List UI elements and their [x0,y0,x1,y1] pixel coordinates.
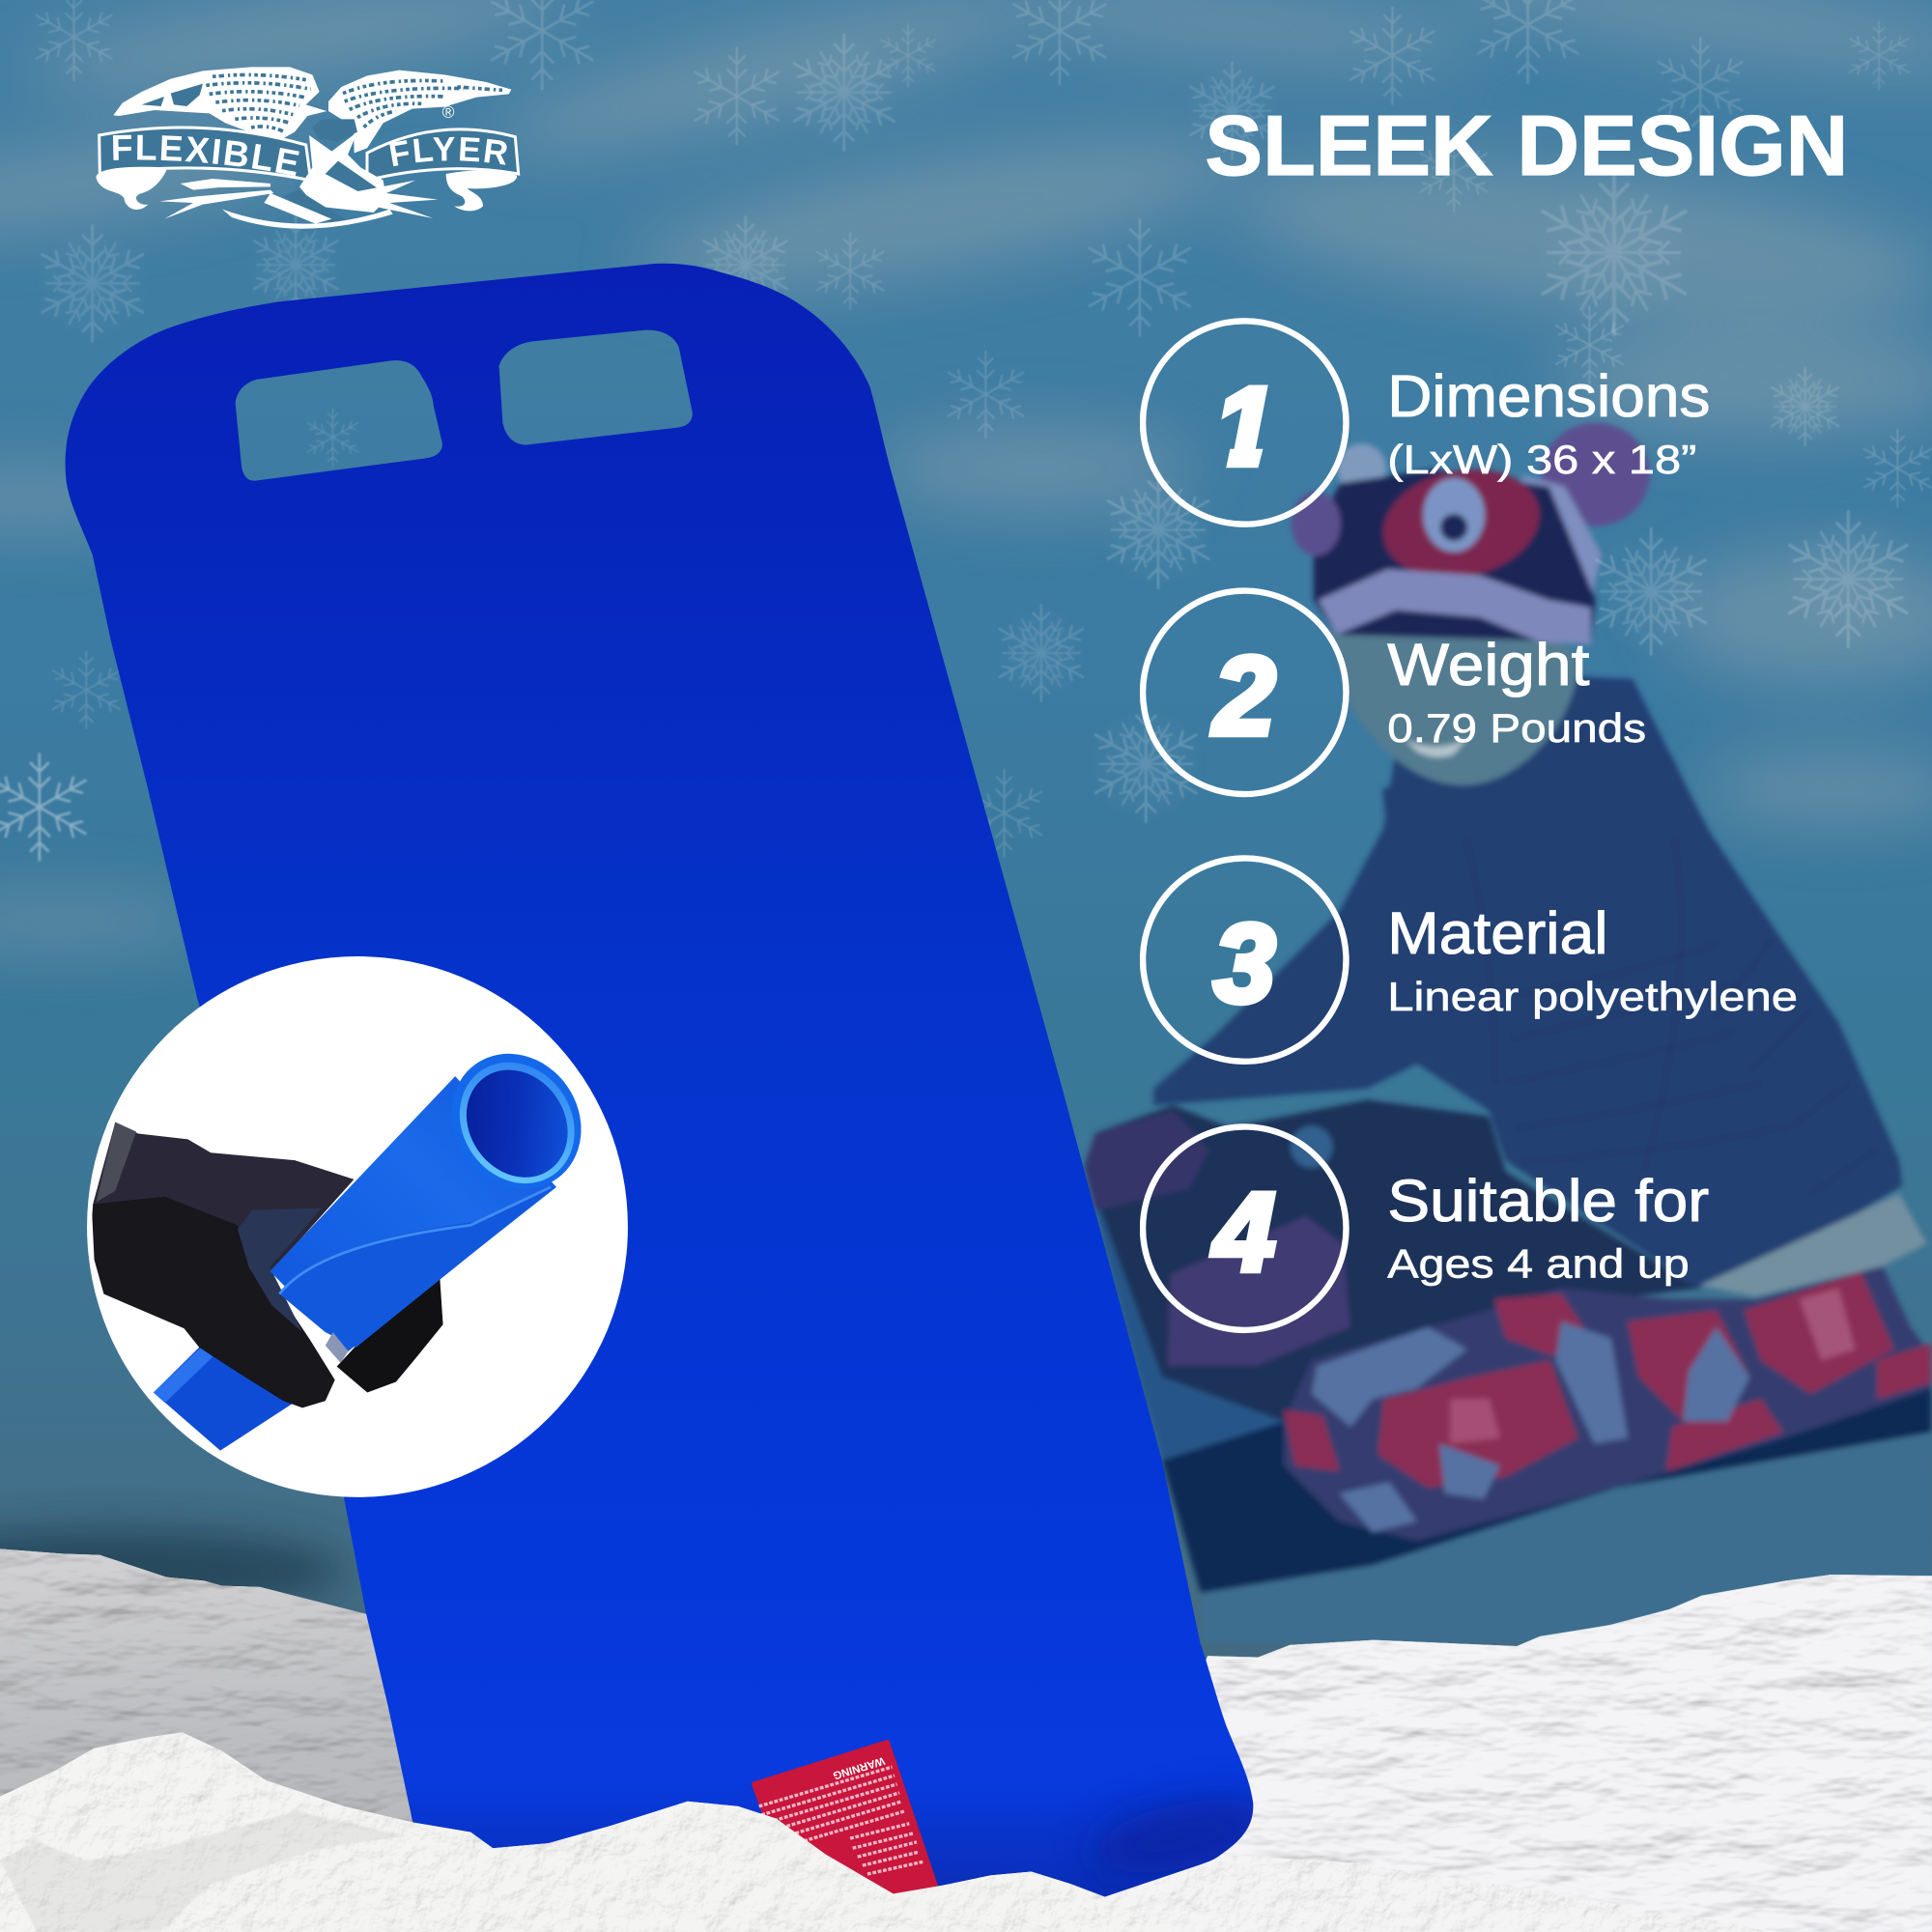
hat [1337,443,1386,493]
right banner: FLYER [389,137,507,166]
badge 4: 4 [1211,1171,1275,1294]
left banner [96,126,311,210]
shirt hem [1700,1194,1927,1296]
value: material: Linear polyethylene [1387,974,1798,1019]
product: blue sled sheet with handle cut-outs [66,264,1280,1919]
logo: Flexible Flyer eagle [96,67,520,229]
back snow: left [0,1548,493,1932]
left banner: FLEXIBLE [112,135,299,176]
right wing [312,71,511,153]
lap and mittens [1084,1099,1700,1421]
spec 2: weight [1143,591,1646,794]
badge 2: 2 [1211,635,1275,758]
badge 3 [1143,858,1346,1062]
value: suitable for: Ages 4 and up [1387,1241,1690,1287]
spec 1: dimensions [1143,321,1710,525]
badge 3: 3 [1213,902,1275,1026]
lower end of roll [153,1347,292,1451]
badge 1: 1 [1213,365,1275,489]
inset photo: gloved hand holding rolled sled [87,956,628,1497]
back snow: right [1109,1575,1932,1932]
registered mark: ® [442,102,455,122]
spec 3: material [1143,858,1798,1062]
right banner [365,128,520,211]
value: dimensions: (LxW) 36 x 18” [1387,437,1696,482]
badge 2 [1143,591,1346,794]
front snow lower right [1084,1855,1775,1932]
heading: suitable for: Suitable for [1387,1168,1709,1234]
glove back [93,1122,354,1271]
heading: weight: Weight [1387,632,1589,697]
fingers [337,1279,443,1393]
collar and hood [1382,676,1713,838]
heading: dimensions: Dimensions [1387,363,1710,429]
warning label [754,1743,935,1919]
jacket [1153,756,1902,1289]
glove cuff [238,1208,322,1332]
warning label: WARNING [832,1754,886,1781]
badge 4 [1143,1126,1346,1330]
title: SLEEK DESIGN [1205,98,1848,193]
glove palm [92,1197,335,1407]
spec 4: suitable for [1143,1126,1709,1330]
roll opening [460,1053,582,1182]
face [1331,614,1579,785]
value: weight: 0.79 Pounds [1387,705,1646,751]
front snow mound [0,1732,1171,1932]
rolled sheet body [270,1076,556,1351]
background photo: child sitting on sled [1084,423,1931,1642]
badge 1 [1143,321,1346,525]
eagle body, shield and arrows [159,132,438,229]
shaded snow and sled [1201,1433,1931,1642]
heading: material: Material [1387,900,1608,966]
foreground snowflakes over child [1083,305,1932,828]
dark haze above left snow [0,1529,345,1613]
left wing [113,67,327,140]
snow pants [1284,1266,1931,1541]
background snowflakes [29,0,1913,858]
